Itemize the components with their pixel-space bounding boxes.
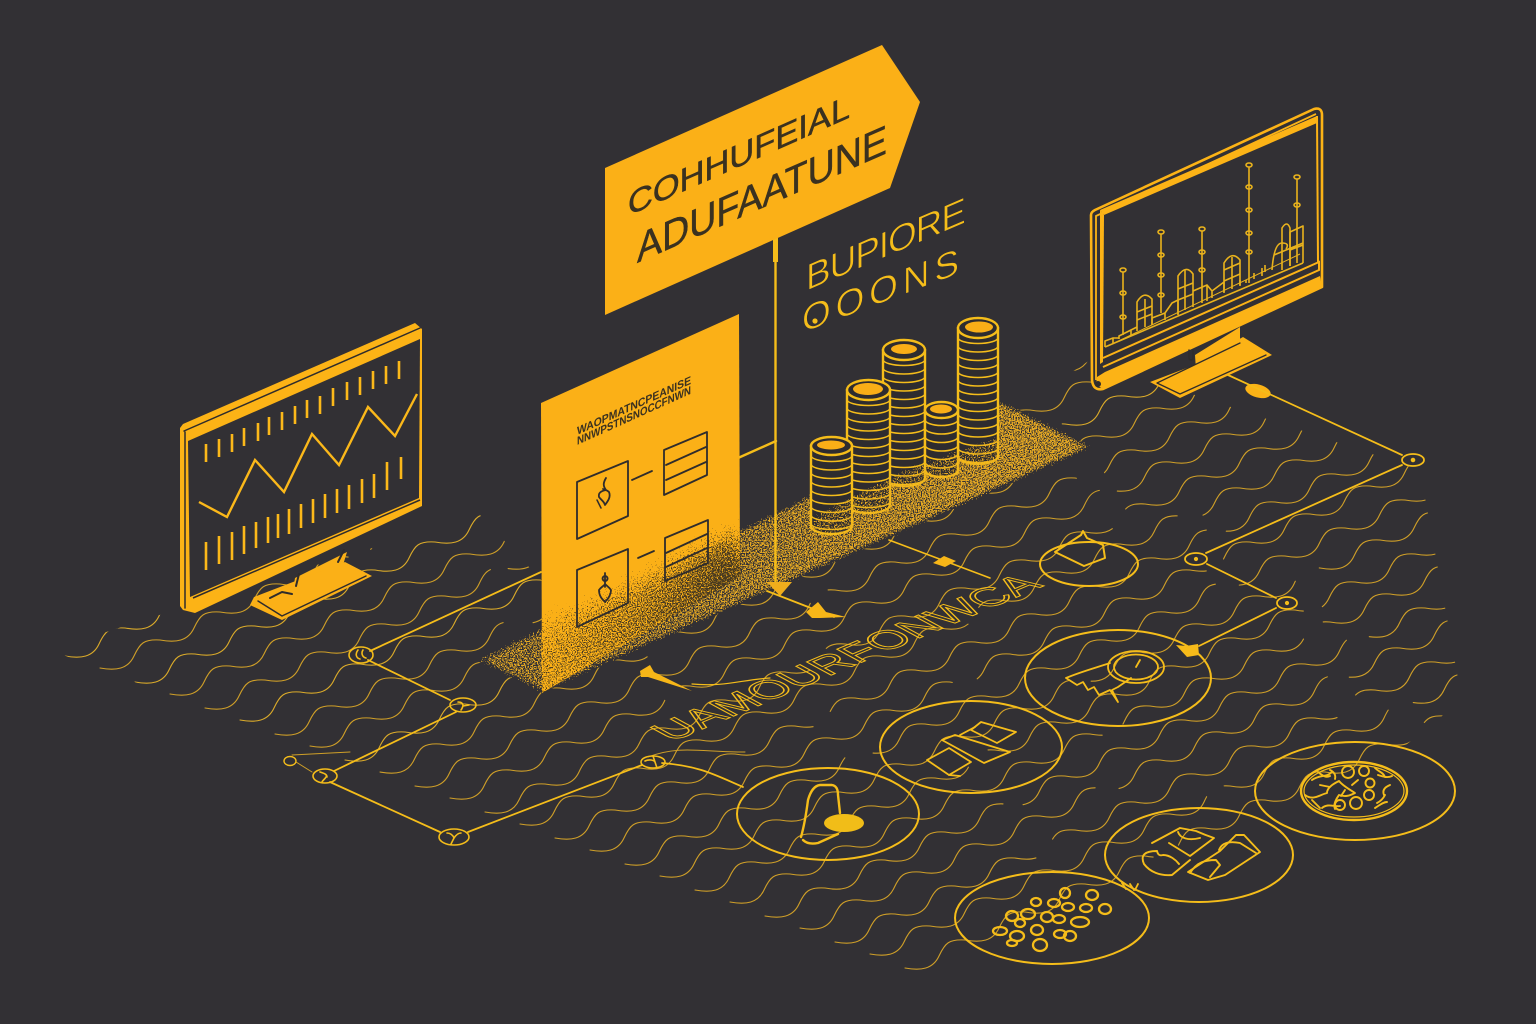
icon: ring cluster — [993, 888, 1111, 951]
circle 7: dots cluster — [955, 872, 1149, 964]
panel heading: WAOPMATNCPEANISE — [577, 373, 691, 438]
node — [313, 769, 337, 783]
node — [1402, 454, 1424, 466]
mouse — [1244, 381, 1272, 401]
node — [641, 756, 665, 768]
connector: pole to panel — [738, 441, 776, 458]
heading: side label: OOONS — [802, 241, 959, 342]
stippled floor plane — [475, 400, 1093, 693]
bar and lollipop chart — [1105, 163, 1303, 347]
curved path label: UAMOURFONWCA — [641, 569, 1052, 746]
circle 5: globe — [1255, 742, 1455, 840]
signpost pole with arrowhead — [767, 238, 792, 596]
coin stack 2 — [847, 380, 890, 513]
circle 3: gauge — [1025, 630, 1211, 726]
monitor stand — [1150, 327, 1272, 398]
signboard title — [605, 45, 920, 315]
icon: gauge and spring — [1066, 651, 1164, 702]
title line 2: ADUFAATUNE — [637, 117, 887, 273]
list box 2 — [665, 520, 708, 581]
title line 1: COHHUFEIAL — [628, 89, 850, 224]
wavy contour field — [64, 362, 1458, 970]
upper tick row — [206, 361, 399, 462]
dash connector 1 — [632, 471, 652, 480]
pin — [1176, 644, 1199, 657]
coin stack 4 — [925, 402, 958, 477]
stipple over stack bases — [805, 435, 1010, 535]
panel grain fade — [542, 519, 741, 692]
node — [1277, 597, 1297, 609]
heading: side label: BUPIORE — [806, 190, 966, 300]
icon: box — [1055, 531, 1105, 566]
line chart — [199, 394, 417, 517]
node — [439, 829, 469, 845]
lollipop stems — [1120, 163, 1300, 335]
left monitor — [180, 323, 422, 620]
icon: boot — [801, 785, 864, 844]
node — [284, 756, 296, 766]
list box 1 — [664, 432, 707, 495]
arrow: floor to path — [889, 540, 990, 578]
monitor stand — [250, 550, 372, 620]
circle 1: boot — [737, 768, 919, 860]
icon: pepper box — [577, 461, 628, 539]
coin stacks chart — [805, 318, 1010, 535]
circle 2: devices — [880, 701, 1062, 793]
circle 6: cards — [1105, 808, 1293, 902]
node — [450, 698, 476, 712]
coin stack 3 — [883, 340, 925, 486]
node — [349, 647, 373, 663]
icon: devices — [927, 722, 1016, 776]
coin stack 5 — [958, 318, 998, 464]
panel: feature card — [541, 314, 741, 693]
icon: pattern disc — [1301, 762, 1407, 820]
icon: anchor box — [577, 549, 628, 627]
node — [1185, 553, 1207, 565]
circle 4: top — [1040, 531, 1138, 586]
panel heading: NNWPSTNSNOCCFNWN — [577, 383, 691, 448]
coin stack 1 — [811, 437, 852, 534]
arrow: dart left — [640, 665, 770, 691]
dash connector 2 — [638, 551, 654, 558]
network connectors left — [284, 572, 745, 845]
lower tick row — [206, 457, 401, 570]
arrow: from pole to path — [767, 591, 846, 618]
network connectors right — [1185, 375, 1424, 646]
tab between circles — [1122, 883, 1138, 890]
icon: cards — [1143, 828, 1260, 880]
right monitor — [1091, 109, 1322, 401]
